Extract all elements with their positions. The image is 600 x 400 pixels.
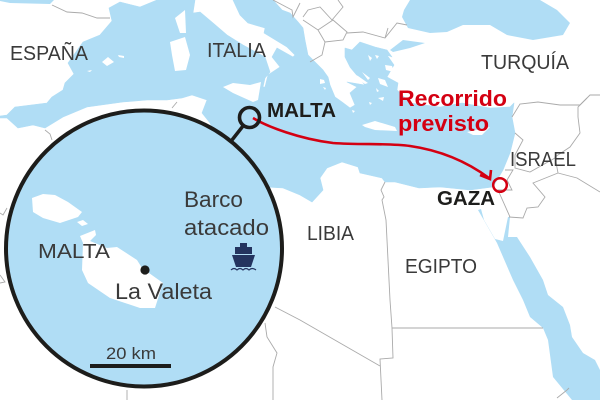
route arrow: Malta to Gaza — [253, 118, 491, 179]
connector: inset to Malta — [232, 126, 243, 140]
label: España: ESPAÑA — [10, 41, 89, 65]
label: Egipto: EGIPTO — [405, 256, 477, 278]
label: Israel: ISRAEL — [510, 149, 576, 171]
Mediterranean Sea — [0, 0, 515, 202]
scale label: 20 km — [106, 344, 156, 363]
label: La Valeta: La Valeta — [115, 279, 213, 304]
Atlantic strip — [0, 0, 54, 4]
label: Libia: LIBIA — [307, 223, 355, 245]
scale bar — [90, 364, 171, 368]
label: Barco atacado — [184, 187, 269, 240]
label: Turquía: TURQUÍA — [481, 51, 570, 74]
Red Sea — [478, 209, 600, 400]
label: Recorrido previsto — [398, 86, 507, 136]
label: Malta inset: MALTA — [38, 241, 111, 263]
label: Recorrido previsto: Recorrido — [398, 86, 507, 111]
inset circle — [6, 110, 282, 386]
marker: Malta ring — [240, 108, 260, 128]
label: Barco atacado: Barco — [184, 187, 243, 212]
island: Malta — [80, 230, 163, 308]
marker: Gaza ring — [493, 178, 507, 192]
label: Gaza: GAZA — [437, 188, 495, 210]
marker: La Valeta — [140, 265, 150, 275]
Sea of Marmara — [390, 40, 425, 52]
label: Malta: MALTA — [267, 100, 336, 122]
island: Gozo — [32, 194, 82, 223]
label: Recorrido previsto: previsto — [398, 111, 489, 136]
islands — [87, 10, 490, 135]
label: Italia: ITALIA — [207, 40, 267, 62]
inset map: Malta — [6, 110, 282, 386]
Black Sea — [402, 0, 570, 40]
icon: ship — [231, 243, 256, 270]
label: Barco atacado: atacado — [184, 215, 269, 240]
island: Comino — [77, 220, 88, 226]
